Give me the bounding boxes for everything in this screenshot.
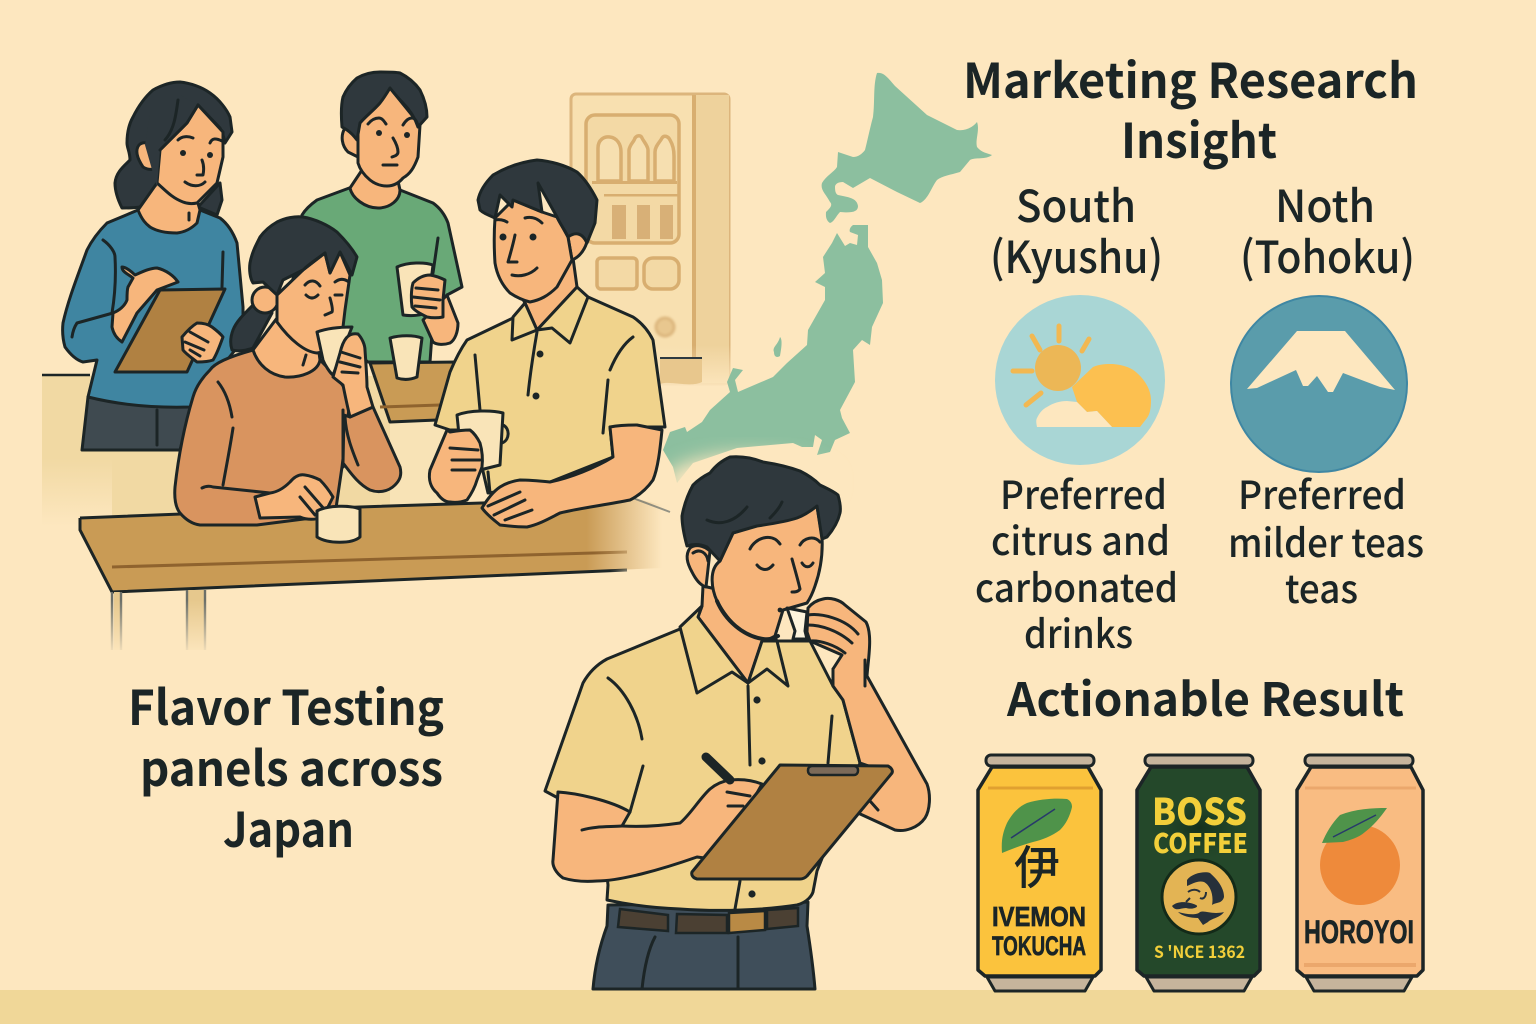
- text: south preference: [975, 465, 1178, 660]
- person: man in green shirt: [290, 72, 462, 362]
- map: Hokkaido: [822, 73, 992, 223]
- can: ivemon tokucha: 伊: [1014, 832, 1060, 898]
- tasting hand and right arm: [807, 598, 929, 830]
- region label: south: South: [1016, 171, 1136, 235]
- caption: flavor testing: Flavor Testing: [128, 669, 444, 739]
- hair: [682, 457, 840, 561]
- polo man left hand: [429, 430, 482, 502]
- polo man arm: [482, 425, 662, 527]
- map of Japan: [663, 73, 992, 483]
- clipboard: blue woman: [115, 289, 225, 372]
- title: marketing research insight: [963, 42, 1418, 172]
- region label: south: (Kyushu): [990, 222, 1163, 286]
- polo collar: [512, 303, 537, 340]
- pen: [706, 757, 730, 780]
- green man hand: [411, 275, 445, 318]
- map lower fade: [666, 454, 834, 510]
- orange woman table hand: [255, 475, 333, 519]
- caption: flavor testing: Japan: [223, 791, 354, 861]
- back counter behind map: [660, 358, 702, 384]
- can: horoyoi: HOROYOI: [1304, 914, 1414, 950]
- green man forearm: [423, 295, 458, 344]
- can: horoyoi: [1297, 755, 1423, 991]
- can: boss coffee: COFFEE: [1153, 822, 1248, 861]
- region label: north: [1240, 171, 1415, 286]
- region label: south: [990, 171, 1163, 286]
- paper cup: on table: [317, 506, 360, 542]
- region label: north: (Tohoku): [1240, 222, 1415, 286]
- collar: [680, 606, 748, 693]
- person: woman in blue sweater: [63, 82, 243, 450]
- person: woman in orange sweater: [175, 217, 401, 525]
- text: south preference: carbonated: [975, 558, 1178, 614]
- trousers: [593, 902, 815, 989]
- person: man in polo shirt: [429, 160, 665, 527]
- vending machine: [560, 94, 740, 390]
- map: Sado island: [774, 337, 782, 357]
- can: ivemon tokucha: TOKUCHA: [992, 931, 1086, 961]
- paper cup: on counter: [390, 336, 422, 379]
- can: ivemon tokucha: IVEMON: [992, 901, 1086, 932]
- orange woman hand: [333, 334, 373, 417]
- icon: sun and cloud: [995, 295, 1165, 465]
- text: south preference: drinks: [1024, 604, 1133, 660]
- boss emblem: [1162, 860, 1236, 934]
- map: Honshu: [663, 225, 883, 483]
- polo man face: [494, 200, 572, 302]
- title: marketing research insight: Insight: [1121, 102, 1277, 172]
- tasting cup: [787, 608, 807, 639]
- can: boss coffee: BOSS: [1152, 782, 1247, 836]
- can: boss coffee: S 'NCE 1362: [1154, 938, 1245, 963]
- blue woman trousers: [82, 397, 192, 450]
- can: ivemon tokucha: [978, 755, 1101, 991]
- blue woman writing hand: [112, 267, 178, 342]
- left arm: [553, 780, 762, 881]
- polo man ear: [568, 230, 587, 260]
- neck: [698, 586, 777, 683]
- heading: actionable result: Actionable Result: [1006, 664, 1404, 730]
- caption: flavor testing: panels across: [140, 730, 443, 800]
- ear: [687, 546, 710, 587]
- text: south preference: Preferred: [1000, 465, 1167, 521]
- clipboard: [692, 765, 892, 879]
- caption: flavor testing: [128, 669, 444, 861]
- text: north preference: milder teas: [1228, 513, 1424, 569]
- icon: mount fuji: [1231, 296, 1407, 472]
- text: north preference: [1228, 465, 1424, 615]
- shirt: [545, 606, 860, 910]
- region label: north: Noth: [1275, 171, 1375, 235]
- back ledge: [42, 375, 462, 526]
- person: front man tasting and writing: [545, 457, 929, 989]
- text: north preference: Preferred: [1238, 465, 1406, 521]
- can: boss coffee: [1137, 755, 1260, 991]
- paper cup: green man: [397, 263, 433, 316]
- blue woman right hand: [182, 323, 223, 362]
- belt: [618, 908, 798, 933]
- table: [80, 498, 670, 655]
- paper cup: polo man: [457, 411, 503, 470]
- floor strip: [0, 990, 1536, 1024]
- middle counter: [370, 336, 458, 422]
- title: marketing research insight: Marketing Research: [963, 42, 1418, 112]
- paper cup: orange woman: [317, 327, 352, 375]
- text: north preference: teas: [1285, 559, 1358, 615]
- table legs: [114, 590, 205, 650]
- face: [712, 506, 822, 639]
- text: south preference: citrus and: [991, 511, 1170, 567]
